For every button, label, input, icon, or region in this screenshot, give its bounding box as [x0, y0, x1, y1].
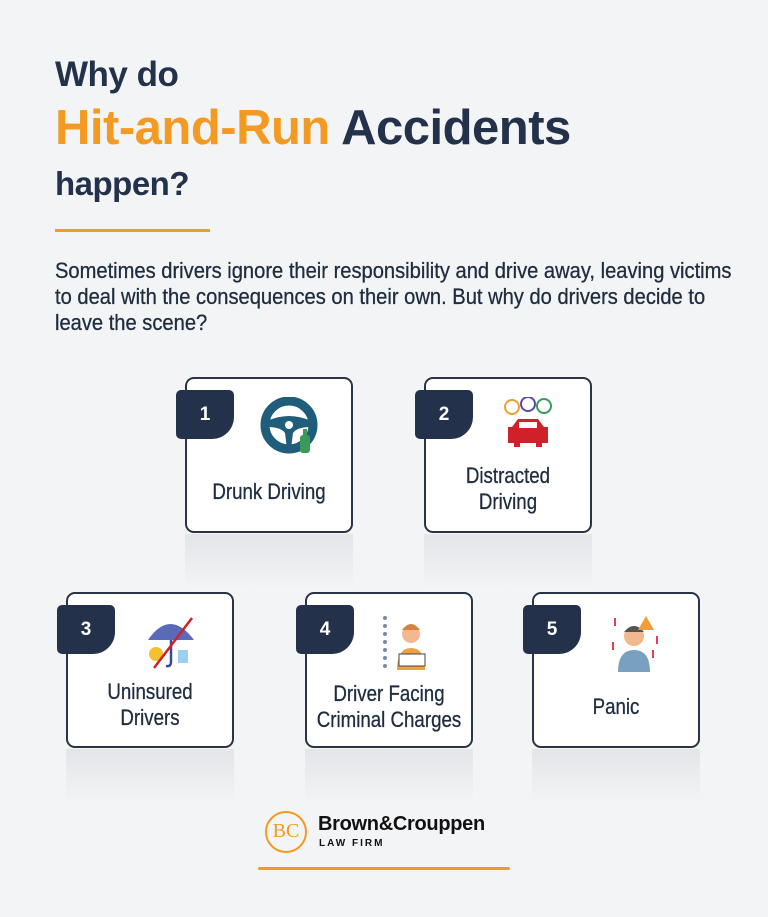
intro paragraph: leave the scene?: [55, 310, 207, 335]
orange divider: [55, 229, 210, 232]
icon: steering wheel: [260, 397, 318, 454]
card 4: criminal charges: Driver Facing: [333, 681, 445, 706]
icon: BC circle: [265, 811, 307, 853]
logo: Brown&Crouppen: [318, 813, 485, 835]
icon: panicked person: [612, 616, 658, 672]
card 1: drunk driving: 1: [200, 404, 210, 424]
card 5: panic: 5: [547, 618, 557, 640]
card 2: distracted driving: Driving: [479, 489, 537, 514]
card 3: uninsured drivers: 3: [81, 618, 91, 640]
card 1: drunk driving: Drunk Driving: [212, 479, 326, 504]
logo: LAW FIRM: [319, 838, 384, 849]
card 5: panic: Panic: [593, 694, 639, 719]
intro paragraph: Sometimes drivers ignore their responsibility and drive away, leaving victims: [55, 258, 731, 283]
card 1: drunk driving: [185, 377, 353, 533]
card 4: criminal charges: Criminal Charges: [317, 707, 461, 732]
intro paragraph: [55, 258, 731, 335]
card 4: criminal charges: [305, 592, 473, 748]
icon: car with bubbles: [504, 397, 552, 447]
card 2: distracted driving: [424, 377, 592, 533]
title: [55, 55, 571, 202]
bottom orange line: [258, 867, 510, 870]
icon: mugshot: [383, 616, 426, 670]
card 3: uninsured drivers: [66, 592, 234, 748]
intro paragraph: to deal with the consequences on their own. But why do drivers decide to: [55, 284, 705, 309]
card 2: distracted driving: Distracted: [466, 463, 550, 488]
icon: crossed umbrella: [148, 617, 194, 669]
icon: BC circle: BC: [273, 820, 299, 842]
card 3: uninsured drivers: Uninsured: [107, 679, 193, 704]
card 5: panic: [532, 592, 700, 748]
card 2: distracted driving: 2: [439, 404, 449, 424]
logo: [265, 811, 485, 853]
title: happen?: [55, 165, 189, 202]
card 4: criminal charges: 4: [320, 618, 330, 640]
title: Hit-and-Run Accidents: [55, 101, 571, 155]
title: Why do: [55, 55, 178, 94]
card 3: uninsured drivers: Drivers: [120, 705, 180, 730]
